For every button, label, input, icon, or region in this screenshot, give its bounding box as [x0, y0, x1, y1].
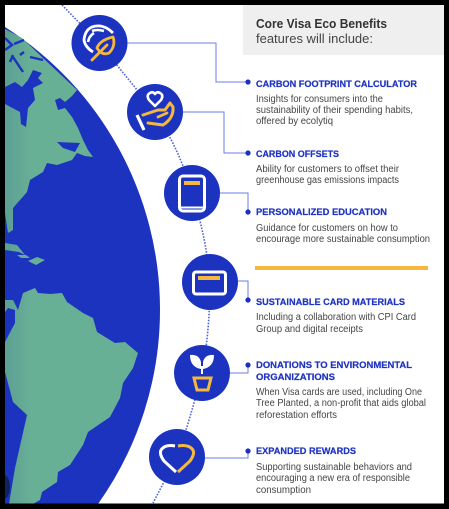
dark corner shadow	[0, 475, 10, 499]
item: carbon offsets: greenhouse gas emissions impacts	[256, 175, 399, 186]
item: personalized education: Guidance for customers on how to	[256, 223, 398, 234]
icon: hand with heart	[127, 84, 183, 140]
item: donations to environmental organizations: When Visa cards are used, including One	[256, 387, 422, 398]
item: carbon offsets	[256, 148, 400, 186]
item: donations to environmental organizations: Tree Planted, a non-profit that aids global	[256, 398, 426, 409]
item: personalized education: PERSONALIZED EDUCATION	[256, 206, 387, 217]
item: sustainable card materials: Group and digital receipts	[256, 324, 363, 335]
item: donations to environmental organizations: ORGANIZATIONS	[256, 371, 335, 382]
connector dots	[245, 79, 251, 454]
item: expanded rewards: encouraging a new era of responsible	[256, 473, 410, 484]
item: carbon offsets: Ability for customers to offset their	[256, 164, 400, 175]
item: sustainable card materials: Including a collaboration with CPI Card	[256, 312, 416, 323]
item: carbon footprint calculator	[256, 78, 417, 127]
dotted orbit	[62, 5, 210, 503]
item: sustainable card materials: SUSTAINABLE CARD MATERIALS	[256, 296, 405, 307]
land: Caribbean and Central America	[5, 243, 45, 265]
item: expanded rewards: consumption	[256, 485, 311, 496]
icon: globe with leaf	[72, 15, 128, 71]
item: donations to environmental organizations: reforestation efforts	[256, 410, 337, 421]
yellow divider bar	[255, 266, 428, 270]
globe	[0, 27, 160, 504]
land: North America	[5, 29, 93, 233]
heading panel: Core Visa Eco Benefits	[256, 17, 387, 31]
item: personalized education	[256, 206, 430, 245]
item: expanded rewards: Supporting sustainable behaviors and	[256, 462, 412, 473]
item: donations to environmental organizations: DONATIONS TO ENVIRONMENTAL	[256, 359, 412, 370]
heading panel: features will include:	[256, 32, 373, 46]
item: expanded rewards: EXPANDED REWARDS	[256, 445, 356, 456]
item: personalized education: encourage more sustainable consumption	[256, 234, 430, 245]
land: South America	[5, 288, 138, 504]
item: expanded rewards	[256, 445, 412, 496]
icon: booklet	[164, 165, 220, 221]
item: carbon offsets: CARBON OFFSETS	[256, 148, 339, 159]
icon: card	[182, 254, 238, 310]
icon: plant pot	[174, 345, 230, 401]
item: sustainable card materials	[256, 296, 416, 335]
item: carbon footprint calculator: offered by ecolytiq	[256, 116, 333, 127]
item: carbon footprint calculator: Insights for consumers into the	[256, 94, 383, 105]
icon: heart	[149, 429, 205, 485]
connector lines	[127, 43, 248, 458]
item: carbon footprint calculator: CARBON FOOTPRINT CALCULATOR	[256, 78, 417, 89]
arctic channels and lakes	[5, 38, 80, 152]
item: carbon footprint calculator: sustainability of their spending habits,	[256, 105, 413, 116]
item: donations to environmental organizations	[256, 359, 426, 421]
heading panel	[243, 5, 444, 55]
